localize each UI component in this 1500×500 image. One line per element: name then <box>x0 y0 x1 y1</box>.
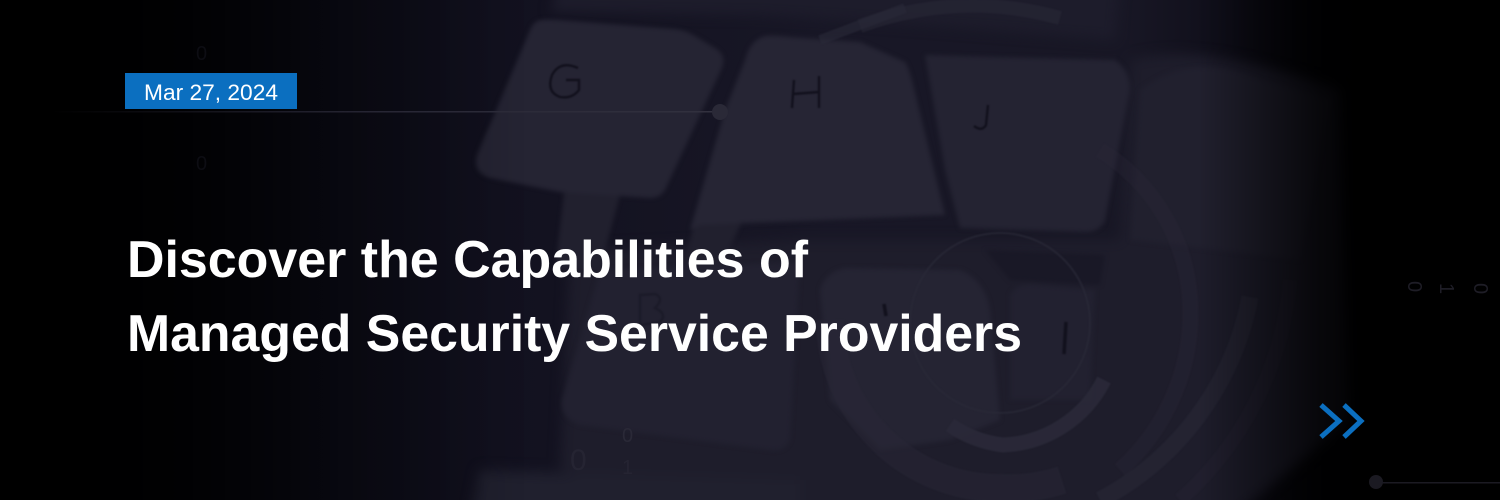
rings overlay <box>820 6 1290 500</box>
binary digits: 0 <box>196 43 207 65</box>
binary digits: 1 <box>1435 283 1457 294</box>
title: Managed Security Service Providers <box>127 305 1022 363</box>
key M <box>820 268 1000 450</box>
key B <box>562 262 800 450</box>
key H <box>690 36 945 230</box>
binary digits: 1 <box>622 457 633 479</box>
icon: double chevron arrow <box>1321 405 1361 437</box>
title: Discover the Capabilities of <box>127 231 809 289</box>
date badge: Mar 27, 2024 <box>144 80 278 105</box>
title <box>127 231 1022 363</box>
key stem right <box>680 200 745 280</box>
key G <box>476 20 723 198</box>
binary digits: 0 <box>570 444 587 477</box>
binary digits: 0 <box>1469 283 1491 294</box>
binary digits: 0 <box>196 153 207 175</box>
soft lower keys <box>470 0 1350 500</box>
key stem left <box>555 185 620 270</box>
key right <box>1130 67 1330 260</box>
key J <box>925 55 1130 232</box>
key letters <box>550 65 1066 354</box>
keyboard keys photo <box>470 0 1350 500</box>
binary digits <box>196 43 1491 479</box>
date badge <box>125 73 297 109</box>
bottom connector line <box>1369 475 1500 489</box>
top connector line <box>50 104 728 120</box>
binary digits: 0 <box>622 425 633 447</box>
key N <box>1010 284 1095 400</box>
dark gap around N <box>985 250 1105 285</box>
binary digits: 0 <box>1403 281 1425 292</box>
